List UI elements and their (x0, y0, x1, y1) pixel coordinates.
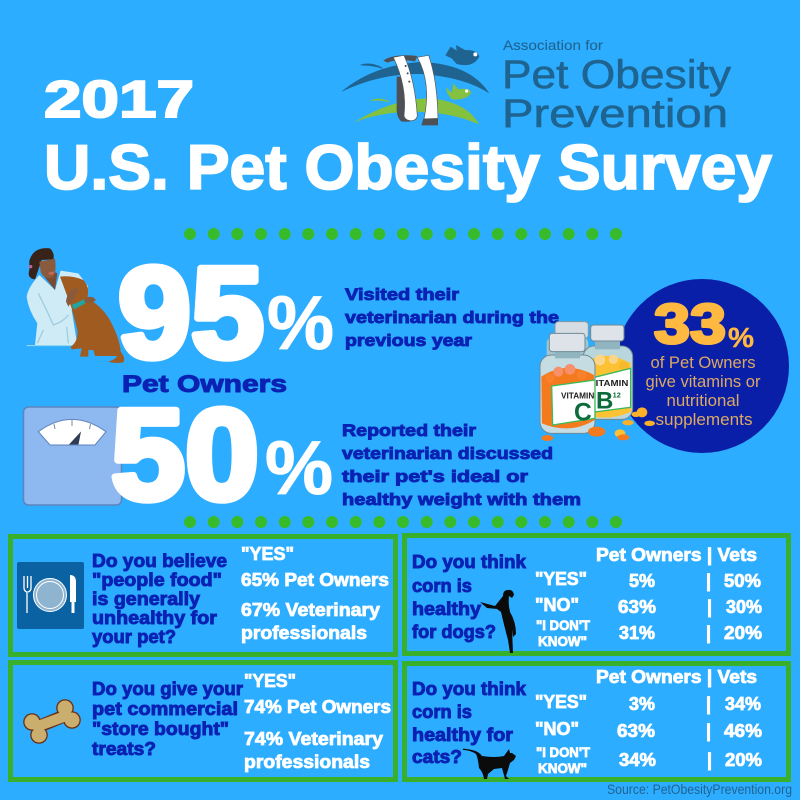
table rows: | (706, 623, 711, 643)
icon: cat silhouette (463, 749, 516, 779)
logo: Association for Pet Obesity Prevention (341, 37, 731, 136)
dotted divider top (184, 228, 622, 240)
dotted divider bottom (184, 516, 622, 528)
table rows: | (707, 597, 712, 617)
bottle: vitamin C: C (574, 400, 592, 427)
callout text: supplements (656, 411, 752, 429)
text: visited veterinarian: Visited their (345, 286, 460, 304)
text: visited veterinarian: previous year (345, 332, 473, 350)
percent sign: % (265, 426, 333, 511)
text: reported discussion: healthy weight with them (342, 491, 581, 509)
table rows: "YES" (535, 569, 587, 589)
icon: plate and cutlery (17, 562, 84, 629)
question text: cats? (412, 747, 462, 767)
table rows: "I DON'T (536, 744, 590, 760)
question text: your pet? (92, 627, 176, 647)
logo text: association: Association for (503, 37, 603, 53)
question text (412, 679, 527, 767)
percent sign: % (267, 281, 334, 366)
table rows: 30% (726, 597, 762, 617)
panel: store bought treats (10, 662, 396, 780)
callout text: of Pet Owners (650, 354, 756, 372)
text: reported discussion: their pet's ideal or (342, 468, 529, 486)
table rows: KNOW" (538, 760, 587, 776)
table rows: 20% (725, 750, 762, 770)
table rows: 5% (629, 571, 655, 591)
panel: people food (10, 536, 396, 654)
bottle: vitamin B12 (583, 325, 633, 419)
question text: unhealthy for (92, 608, 217, 628)
table rows (535, 692, 762, 776)
answers: 65% Pet Owners (241, 570, 389, 590)
answers: 74% Pet Owners (244, 697, 391, 717)
number 33: 33 (654, 292, 726, 355)
text: visited veterinarian (345, 286, 559, 350)
table rows: | (706, 721, 711, 741)
table rows: | (707, 750, 712, 770)
callout text: give vitamins or (646, 373, 761, 391)
table rows: 63% (618, 597, 656, 617)
answers: professionals (244, 752, 370, 772)
table rows: "YES" (535, 692, 587, 712)
question text: is generally (92, 589, 200, 609)
big number 50: 50 (111, 383, 259, 527)
answers: "YES" (241, 544, 294, 564)
answers: 67% Veterinary (241, 600, 380, 620)
stat: 95 percent (118, 241, 334, 385)
answers (244, 671, 391, 772)
bottle: vitamin B12: 12 (613, 390, 621, 399)
table rows: 63% (617, 721, 655, 741)
table rows: | (706, 694, 711, 714)
icon: weighing scale (24, 407, 122, 505)
question text (412, 552, 527, 642)
question text: for dogs? (412, 622, 496, 642)
callout: 33 percent supplements (615, 279, 789, 453)
bottle: vitamin C (540, 333, 595, 433)
table rows: 34% (619, 750, 656, 770)
question text: healthy (412, 599, 481, 619)
title: survey name: U.S. Pet Obesity Survey (44, 133, 772, 203)
table rows: 34% (725, 694, 761, 714)
table rows: 46% (724, 721, 762, 741)
table rows: 50% (724, 571, 761, 591)
bottle: vitamin B12: ITAMIN (596, 379, 629, 388)
question text: "people food" (92, 570, 222, 590)
table header: Pet Owners | Vets (596, 667, 757, 687)
answers: "YES" (244, 671, 296, 691)
panel: corn for dogs (404, 536, 788, 654)
table rows: 20% (724, 623, 762, 643)
question text: corn is (412, 576, 472, 596)
bottle: vitamin C: VITAMIN (561, 390, 594, 400)
question text: healthy for (412, 725, 513, 745)
answers: professionals (241, 623, 367, 643)
big number 95: 95 (118, 241, 264, 385)
question text: pet commercial (92, 699, 238, 719)
logo text: prevention: Prevention (502, 92, 728, 136)
table rows: 31% (619, 623, 655, 643)
illustration: vitamin bottles (540, 322, 655, 441)
logo icon: collar, tape measure, dog and cat (341, 45, 489, 125)
question text: Do you think (412, 679, 527, 699)
stat: 50 percent (111, 383, 333, 527)
table rows: "NO" (535, 595, 579, 615)
question text: corn is (412, 702, 472, 722)
illustration: veterinarian with dog (27, 248, 124, 363)
question text: Do you give your (92, 679, 243, 699)
panel: corn for cats (404, 664, 788, 780)
table rows: "NO" (535, 719, 579, 739)
question text: "store bought" (92, 719, 229, 739)
title: year: 2017 (44, 71, 194, 129)
callout text (646, 354, 761, 429)
table rows: | (706, 571, 711, 591)
text: reported discussion: veterinarian discussed (342, 445, 553, 463)
table rows: 3% (629, 694, 655, 714)
table rows (535, 569, 762, 649)
question text: Do you think (412, 552, 527, 572)
table rows: "I DON'T (536, 617, 590, 633)
question text (92, 551, 227, 647)
icon: bone (23, 699, 81, 744)
icon: dog silhouette (480, 590, 516, 653)
text: reported discussion: Reported their (342, 422, 477, 440)
question text: Do you believe (92, 551, 227, 571)
text: visited veterinarian: veterinarian during the (345, 309, 559, 327)
table header: Pet Owners | Vets (596, 545, 757, 565)
answers (241, 544, 389, 643)
bottle: vitamin B12: B (596, 388, 613, 415)
answers: 74% Veterinary (244, 729, 383, 749)
callout text: nutritional (666, 392, 740, 410)
question text: treats? (92, 739, 156, 759)
question text (92, 679, 243, 759)
spilled pills (541, 407, 655, 441)
logo text: pet obesity: Pet Obesity (502, 53, 731, 97)
percent sign: % (728, 322, 754, 353)
label: pet owners: Pet Owners (122, 371, 287, 398)
table rows: KNOW" (538, 633, 587, 649)
text: reported discussion (342, 422, 581, 509)
